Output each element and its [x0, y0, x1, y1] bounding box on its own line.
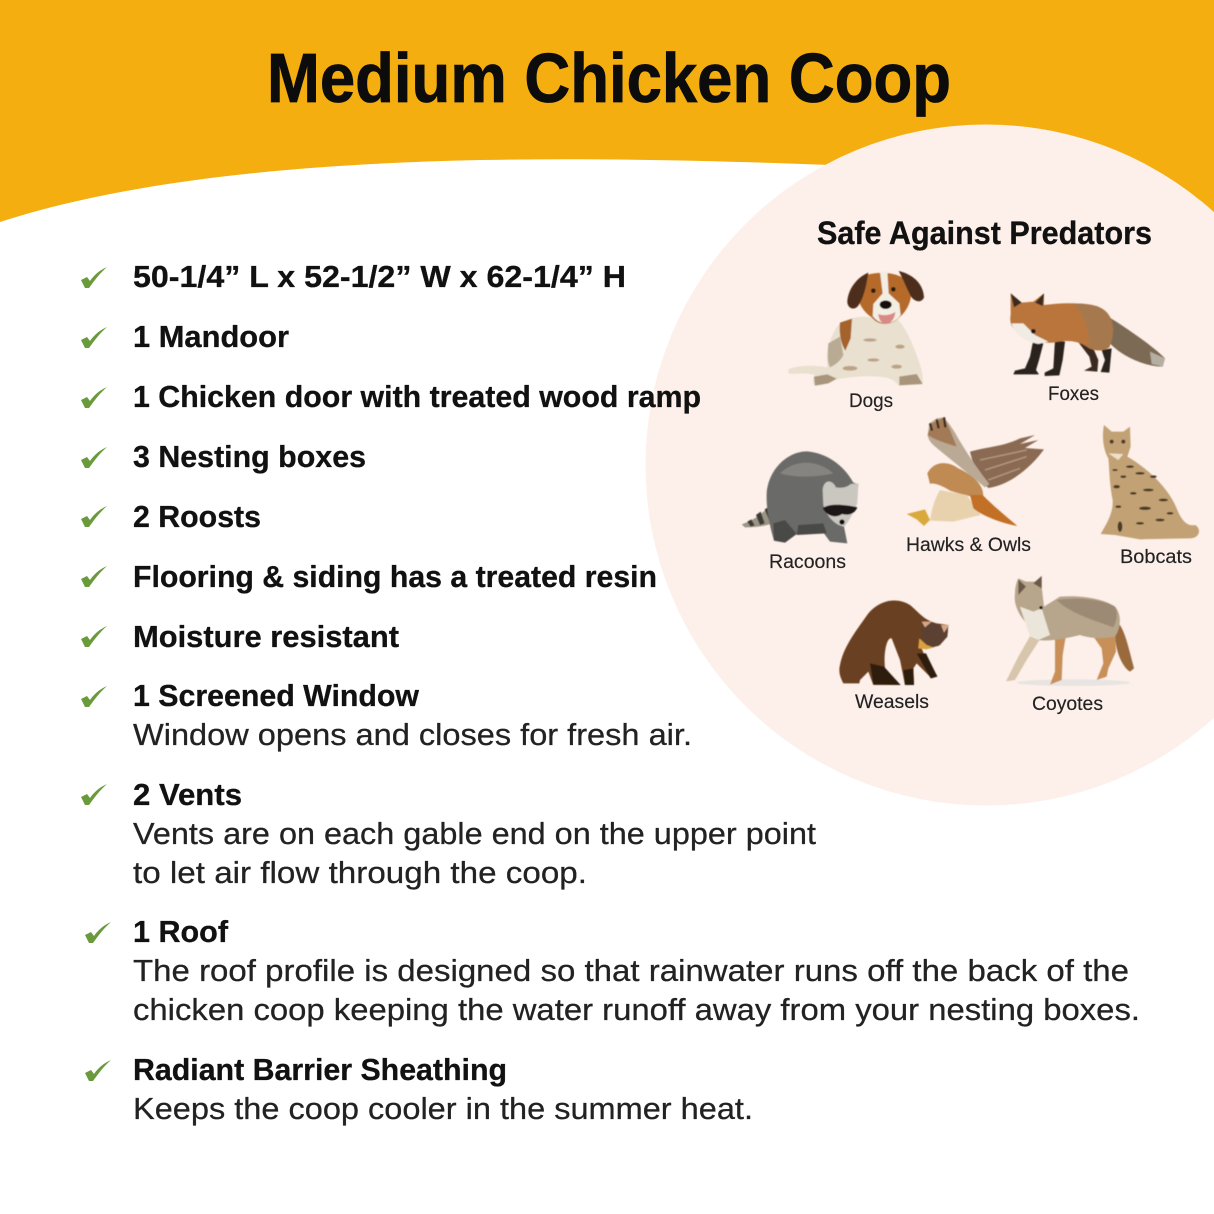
item: chicken door: 1 Chicken door with treated wood ramp — [133, 379, 701, 414]
item: screened window — [81, 678, 692, 752]
item: dimensions: 50-1/4” L x 52-1/2” W x 62-1/4” H — [133, 259, 626, 294]
item: mandoor: 1 Mandoor — [133, 319, 289, 354]
item: screened window: 1 Screened Window — [133, 678, 420, 713]
item: roosts: 2 Roosts — [133, 499, 261, 534]
item: vents — [81, 777, 816, 890]
icon: raccoon — [742, 451, 858, 543]
item: radiant barrier: Radiant Barrier Sheathing — [133, 1052, 507, 1087]
feature list — [81, 259, 1140, 1126]
panel: safe against predators circle — [646, 124, 1214, 806]
item: vents: 2 Vents — [133, 777, 242, 812]
item: flooring: Flooring & siding has a treated resin — [133, 559, 657, 594]
item: screened window: Window opens and closes for fresh air. — [133, 717, 692, 752]
label: Foxes: Foxes — [1048, 384, 1099, 405]
icon: fox — [1010, 293, 1165, 376]
icon: weasel — [839, 600, 949, 685]
item: roof: The roof profile is designed so that rainwater runs off the back of the — [133, 953, 1129, 988]
item: nesting boxes: 3 Nesting boxes — [133, 439, 366, 474]
title: Medium Chicken Coop — [267, 39, 951, 117]
label: Dogs: Dogs — [849, 391, 893, 412]
item: moisture: Moisture resistant — [133, 619, 399, 654]
item: vents: Vents are on each gable end on the upper point — [133, 816, 816, 851]
item: roof — [85, 914, 1140, 1027]
label: Racoons: Racoons — [769, 552, 846, 573]
icon: dog — [788, 271, 924, 386]
label: Coyotes: Coyotes — [1032, 694, 1103, 715]
icon: hawk — [907, 417, 1044, 526]
item: roof: 1 Roof — [133, 914, 229, 949]
item: roosts — [81, 499, 261, 534]
label: Hawks & Owls: Hawks & Owls — [906, 535, 1031, 556]
label: Weasels: Weasels — [855, 692, 929, 713]
panel heading: Safe Against Predators — [817, 215, 1152, 251]
item: vents: to let air flow through the coop. — [133, 855, 587, 890]
item: radiant barrier: Keeps the coop cooler in the summer heat. — [133, 1091, 753, 1126]
yellow header band — [0, 0, 1214, 240]
icon: coyote — [1006, 576, 1134, 686]
item: roof: chicken coop keeping the water runoff away from your nesting boxes. — [133, 992, 1140, 1027]
label: Bobcats: Bobcats — [1120, 547, 1192, 568]
item: radiant barrier — [85, 1052, 753, 1126]
icon: bobcat — [1101, 425, 1199, 539]
